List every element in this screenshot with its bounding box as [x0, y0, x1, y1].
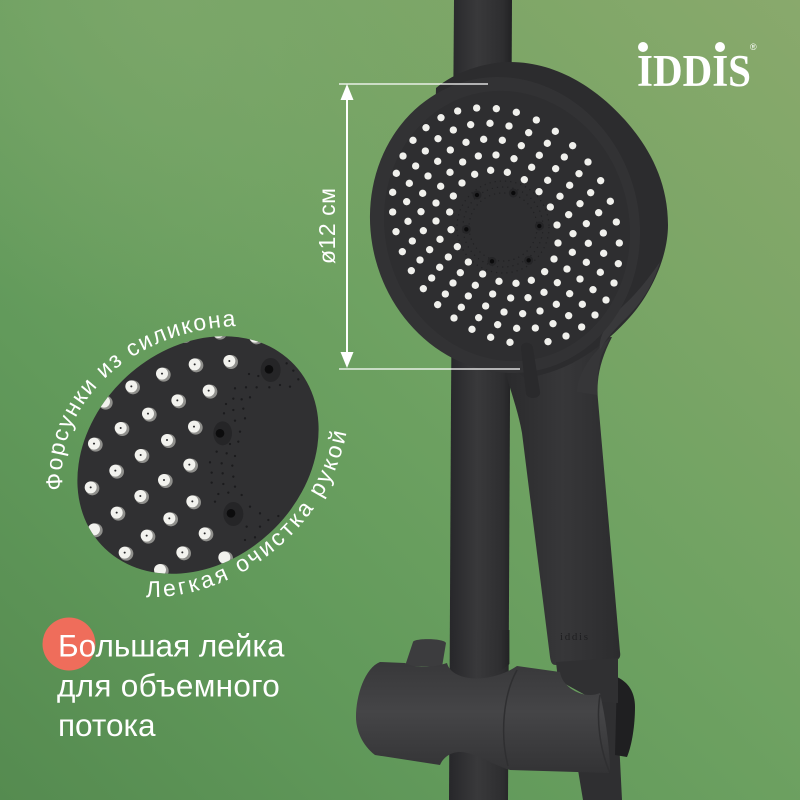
- clamp body: [356, 662, 610, 773]
- heading: потока: [58, 707, 156, 743]
- curved label: silicone nozzles: Форсунки из силикона: [46, 314, 236, 490]
- head back shell: [430, 62, 668, 378]
- knob: [405, 639, 446, 667]
- nozzles: [389, 104, 623, 346]
- logo: IDDIS: [637, 46, 751, 96]
- rail passing in front: [450, 630, 509, 678]
- registered mark: ®: [750, 42, 757, 52]
- center dotted zone: [457, 181, 549, 273]
- back plate: [615, 677, 635, 757]
- lens jets: [213, 358, 281, 526]
- lens nozzles: [85, 326, 264, 578]
- handle logo: iddis: [560, 631, 588, 643]
- shower rail: [449, 0, 512, 800]
- heading: [57, 628, 285, 743]
- shower head: [337, 46, 673, 404]
- head face: [354, 63, 660, 389]
- head face rim: [337, 46, 673, 404]
- heading: для объемного: [57, 668, 280, 704]
- heading: Большая лейка: [58, 628, 285, 664]
- dimension marker: 12 cm: [314, 84, 520, 369]
- mode lever: [521, 343, 540, 398]
- shower hose: [578, 700, 622, 800]
- zoomed nozzle lens: [77, 336, 319, 574]
- neck: [556, 658, 618, 703]
- coral accent circle: [42, 618, 96, 670]
- center jets: [463, 190, 543, 265]
- hand shower handle: [505, 337, 620, 665]
- shower clamp: [356, 630, 635, 773]
- shell highlight: [600, 262, 660, 350]
- dimension label: ø12 см: [314, 188, 340, 264]
- lens micro dots: [209, 362, 299, 541]
- curved label: easy hand cleaning: Легкая очистка рукой: [146, 431, 346, 598]
